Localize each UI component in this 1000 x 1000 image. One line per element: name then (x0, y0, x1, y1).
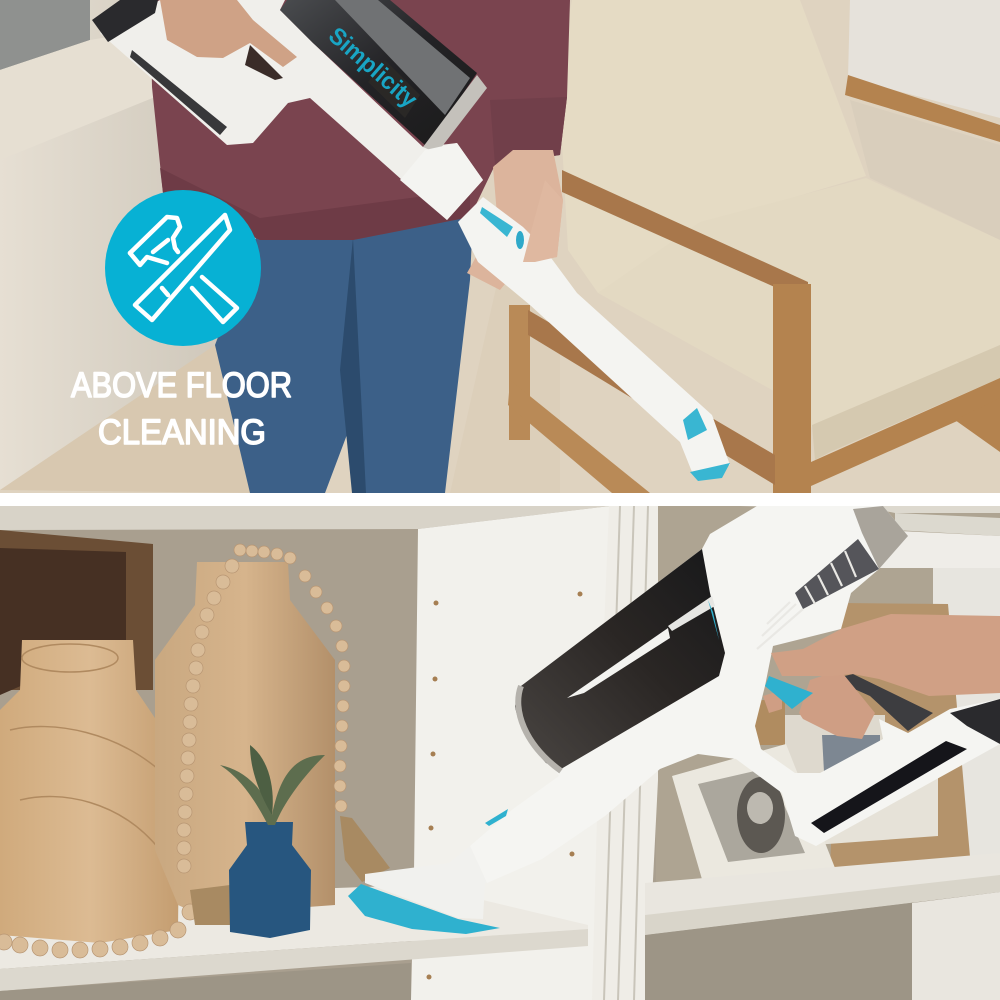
left wooden vase (0, 640, 180, 943)
handheld vacuum body (470, 506, 1000, 883)
person: sweater (150, 0, 570, 240)
left hand (160, 0, 297, 67)
right compartment (656, 506, 1000, 906)
crevice tool wand (458, 197, 730, 481)
shelf ceiling (0, 506, 610, 530)
white shelf divider (411, 506, 610, 1000)
silver cap (853, 506, 908, 569)
fingers over wand (523, 180, 563, 262)
handle vent (811, 741, 967, 833)
right shelf (645, 853, 1000, 1000)
panel: above floor cleaning photo (0, 0, 1000, 493)
blue button (485, 809, 508, 826)
left shelf (0, 885, 588, 1000)
caption: above floor cleaning: CLEANING (98, 413, 266, 452)
blue trigger (765, 676, 813, 709)
icon: above floor cleaning badge (105, 190, 261, 346)
background wall (0, 0, 1000, 493)
pilaster (592, 506, 658, 1000)
brush attachment (348, 846, 500, 934)
right hand (467, 150, 563, 290)
brand label: Simplicity (323, 22, 423, 114)
dust cup (515, 549, 725, 769)
armchair (508, 0, 1000, 493)
vents (795, 539, 879, 609)
caption: above floor cleaning: ABOVE FLOOR (71, 366, 292, 405)
bead necklace (0, 544, 350, 958)
vacuum body held by person (92, 0, 487, 220)
right wooden vase (155, 562, 335, 915)
picture frames (672, 603, 971, 893)
battery (950, 699, 1000, 744)
caption: above floor cleaning (71, 366, 292, 452)
panel: shelf dusting photo (0, 506, 1000, 1000)
handle grip (832, 674, 933, 731)
floor (0, 345, 260, 493)
rope tassels (190, 816, 390, 925)
hand holding vacuum (771, 614, 1000, 696)
dark wood frame (0, 530, 153, 695)
fingers (763, 670, 875, 739)
blue vase with plant (220, 745, 325, 938)
person: jeans (215, 215, 473, 493)
